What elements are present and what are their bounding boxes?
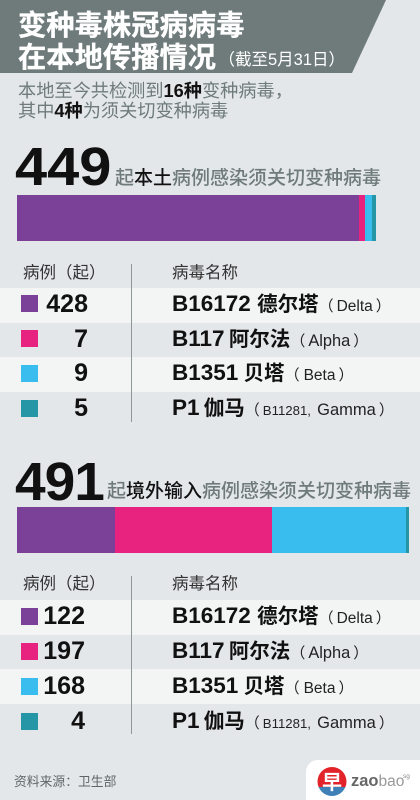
imported cases total: 491 [15,452,104,512]
count: alpha: 7 [74,325,88,353]
title [18,9,345,73]
name: beta: B1351 贝塔（ Beta） [172,360,353,385]
legend: beta [21,365,38,382]
intro text: 其中4种为须关切变种病毒 [18,100,228,120]
local table [0,264,420,422]
count: delta: 122 [43,602,85,630]
legend: alpha [21,330,38,347]
header banner [0,0,386,73]
count: beta: 168 [43,672,85,700]
count: gamma: 5 [74,394,88,422]
legend: alpha [21,643,38,660]
logo: zaobao: zaobao [351,772,404,790]
count: alpha: 197 [43,637,85,665]
column head: cases: 病例（起） [23,575,106,593]
local cases total: 449 [15,137,111,197]
name: delta: B16172 德尔塔（Delta） [172,291,391,316]
name: alpha: B117 阿尔法（Alpha） [172,638,368,663]
local stacked bar [17,195,376,241]
column head: virus name: 病毒名称 [172,264,238,282]
name: gamma: P1 伽马（B11281, Gamma） [172,395,394,420]
count: delta: 428 [46,290,88,318]
legend: delta [21,295,38,312]
legend: gamma [21,713,38,730]
intro text: 本地至今共检测到16种变种病毒， [18,81,293,101]
name: delta: B16172 德尔塔（Delta） [172,603,391,628]
legend: gamma [21,400,38,417]
logo: zaobao: 早 [322,766,342,795]
logo: zaobao: sg [403,773,410,780]
source note: 资料来源：卫生部 [14,774,116,789]
count: gamma: 4 [71,707,85,735]
column head: cases: 病例（起） [23,264,106,282]
date note: （截至5月31日） [218,51,345,69]
intro text [18,81,293,120]
imported cases caption: 起境外输入病例感染须关切变种病毒 [107,481,411,502]
title: 变种毒株冠病病毒 [18,9,244,41]
imported stacked bar [17,507,409,553]
local cases total [15,137,381,197]
logo: zaobao [306,760,420,800]
name: beta: B1351 贝塔（ Beta） [172,673,353,698]
name: alpha: B117 阿尔法（Alpha） [172,326,368,351]
imported table [0,574,420,735]
name: gamma: P1 伽马（B11281, Gamma） [172,708,394,733]
title: 在本地传播情况 [18,41,216,73]
local cases caption: 起本土病例感染须关切变种病毒 [115,168,381,189]
count: beta: 9 [74,359,88,387]
imported cases total [15,452,411,512]
column head: virus name: 病毒名称 [172,575,238,593]
legend: delta [21,608,38,625]
legend: beta [21,678,38,695]
